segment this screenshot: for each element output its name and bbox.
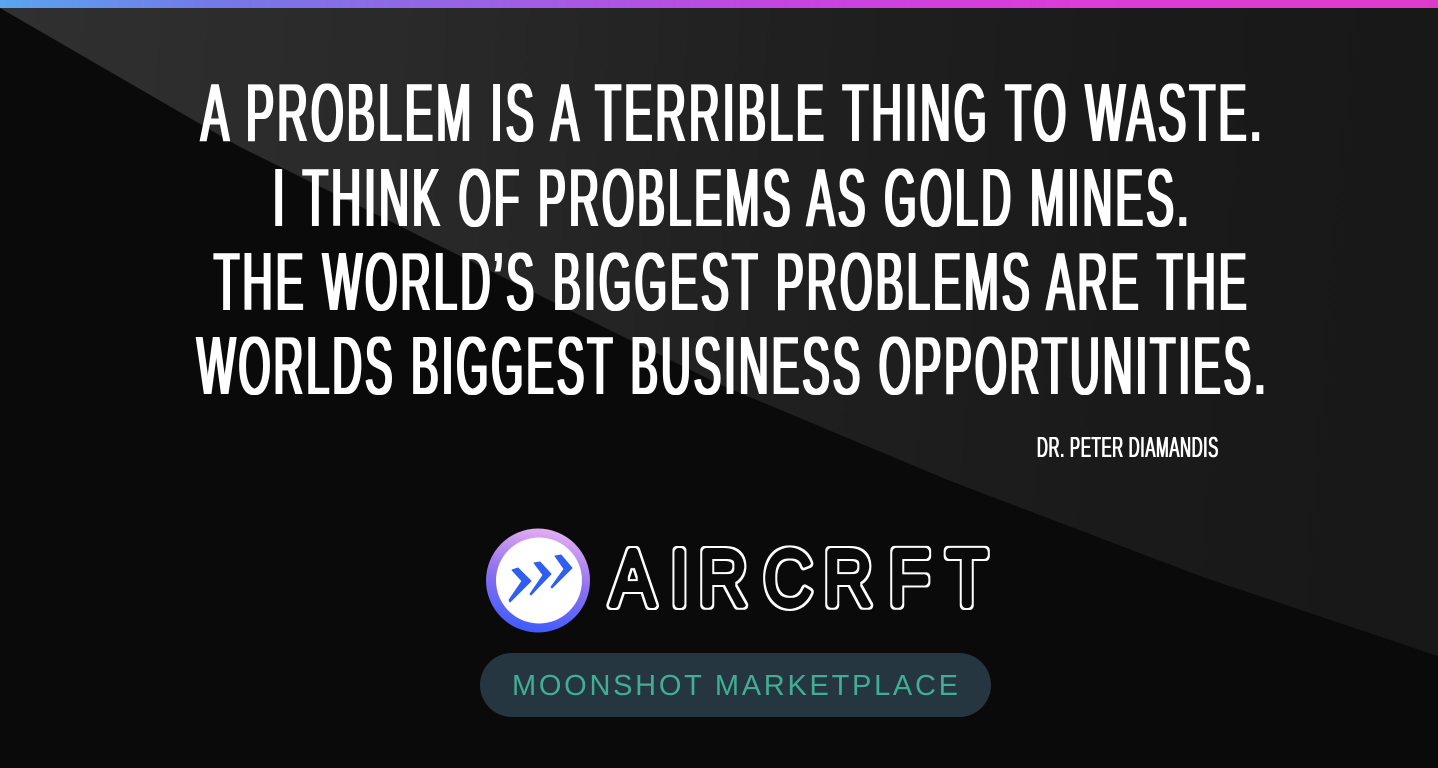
moonshot marketplace pill xyxy=(480,653,991,717)
icon: aircrft logo badge xyxy=(486,528,590,632)
quote text xyxy=(197,66,1269,412)
attribution: DR. PETER DIAMANDIS xyxy=(1037,432,1219,464)
top gradient bar xyxy=(0,0,1438,8)
logo wordmark: AIRCRFT xyxy=(610,533,988,623)
moonshot marketplace pill: MOONSHOT MARKETPLACE xyxy=(512,670,958,702)
